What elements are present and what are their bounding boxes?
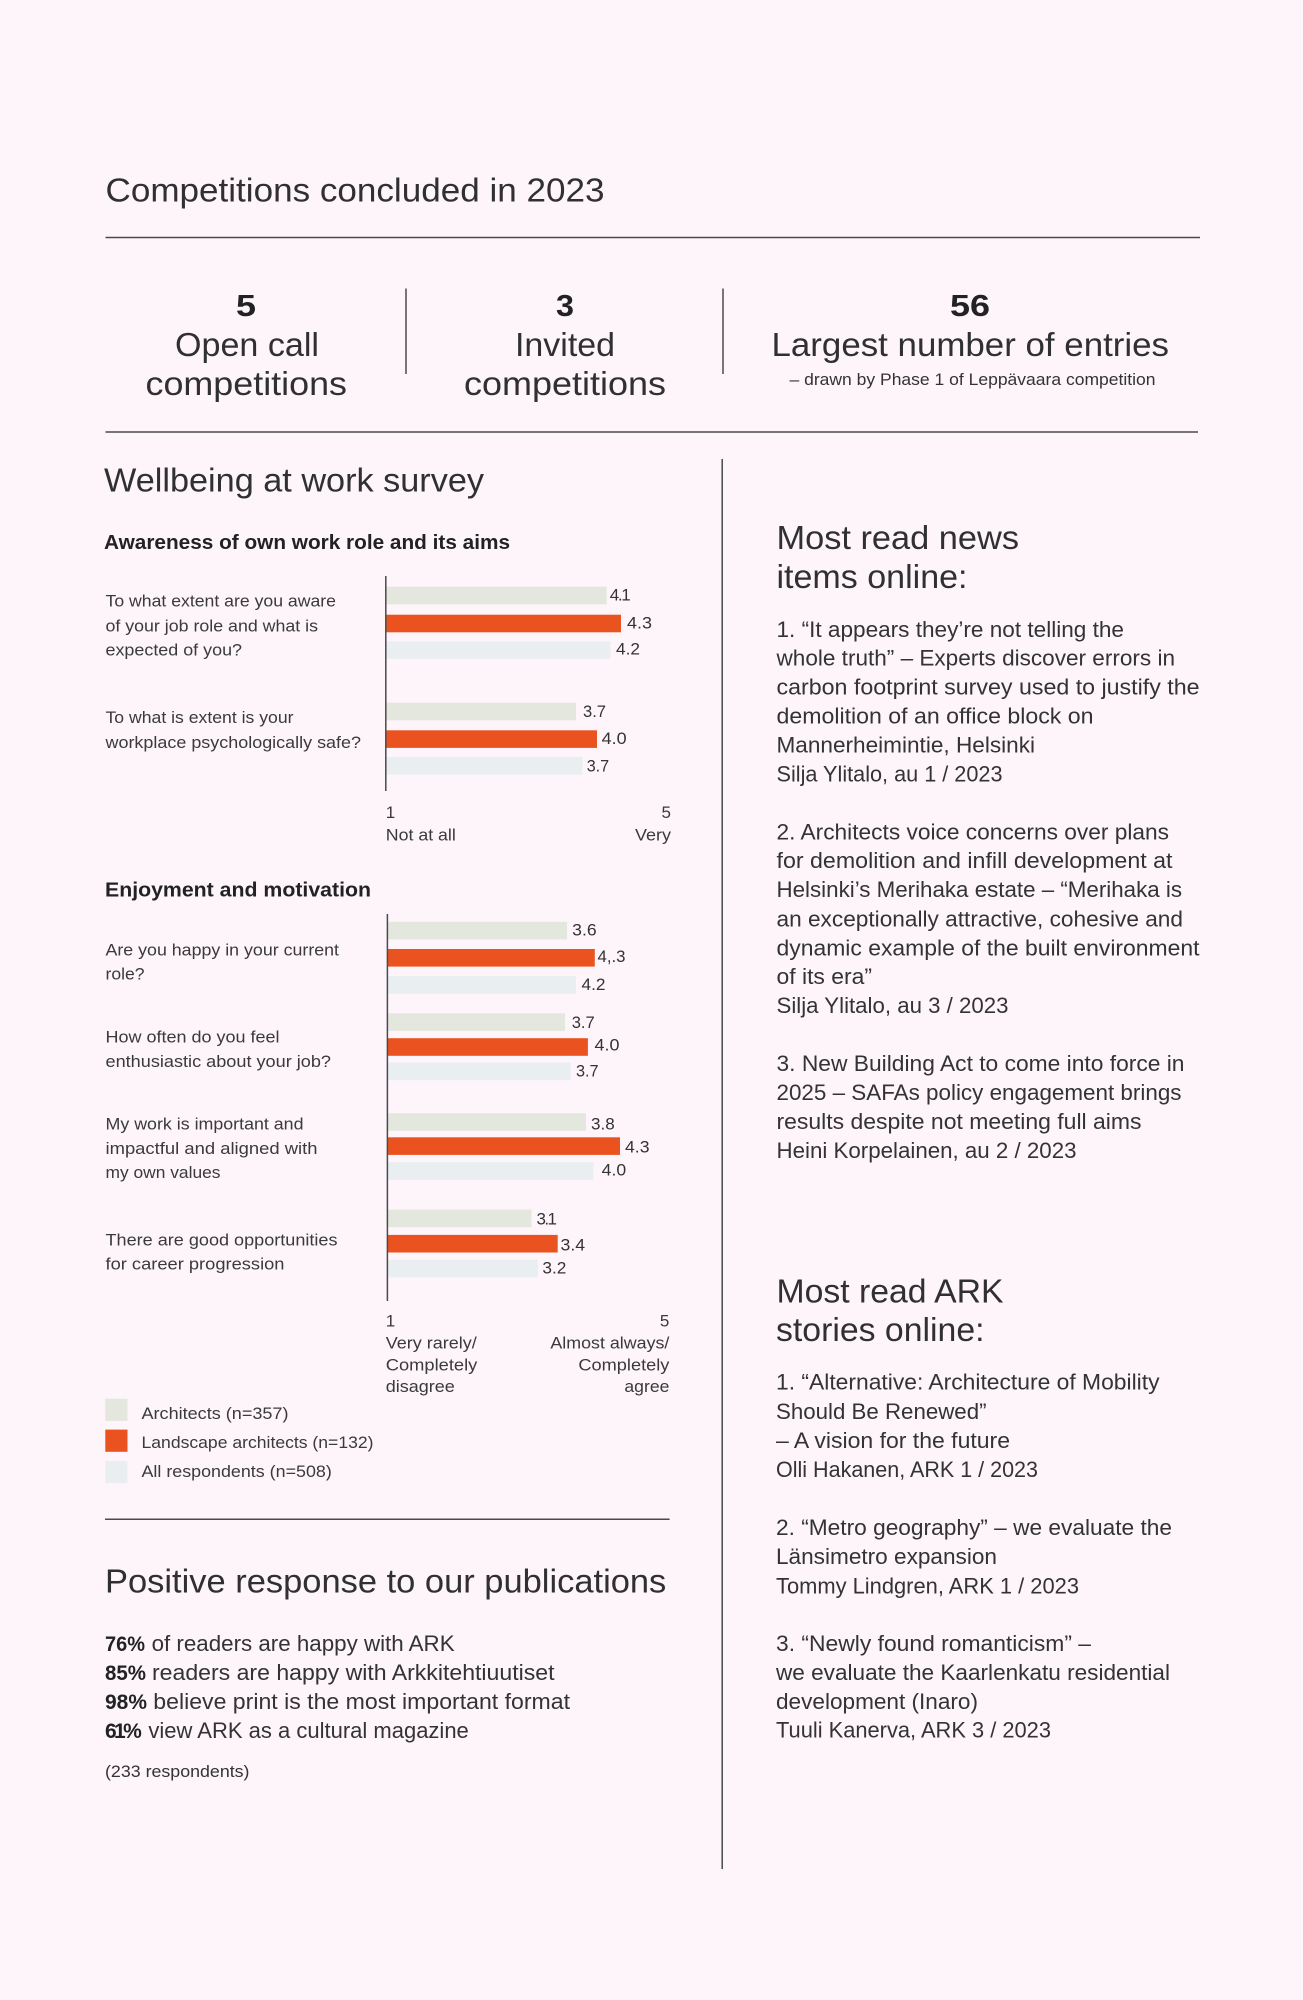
- axis labels: Almost always/: [550, 1334, 670, 1352]
- panel: most read news items: [775, 519, 1200, 1163]
- news item 1: [775, 617, 1200, 786]
- stat: open call competitions: [146, 288, 347, 402]
- stats list: 61%: [105, 1720, 142, 1743]
- news item 1: Mannerheimintie, Helsinki: [776, 732, 1035, 757]
- bar values: 3.7: [587, 756, 609, 776]
- axis labels: disagree: [386, 1377, 455, 1396]
- story 1: 1. “Alternative: Architecture of Mobility: [776, 1370, 1160, 1395]
- heading: most read ARK: [776, 1273, 1004, 1348]
- axis labels: [386, 803, 672, 845]
- bar values: 3.1: [536, 1210, 557, 1228]
- axis labels: Completely: [386, 1355, 478, 1374]
- stats list: 98%: [105, 1691, 147, 1714]
- heading: most read news: Most read news: [776, 519, 1019, 556]
- question labels: workplace psychologically safe?: [104, 733, 361, 752]
- bar values: [583, 586, 652, 776]
- story 2: 2. “Metro geography” – we evaluate the: [776, 1515, 1172, 1540]
- stat: open call competitions: 5: [236, 288, 256, 323]
- footnote: respondents: (233 respondents): [105, 1762, 250, 1781]
- chart: enjoyment and motivation: [106, 914, 670, 1396]
- bar values: 3.7: [583, 702, 606, 721]
- stats list: believe print is the most important format: [153, 1689, 571, 1714]
- heading: most read news: [776, 519, 1019, 595]
- stat: invited competitions: 3: [556, 288, 574, 323]
- news item 2: Silja Ylitalo, au 3 / 2023: [776, 993, 1008, 1018]
- news item 1: demolition of an office block on: [776, 703, 1094, 728]
- bar values: 4.2: [616, 640, 640, 659]
- axis labels: agree: [624, 1377, 669, 1396]
- news item 2: dynamic example of the built environment: [776, 935, 1200, 960]
- story 3: development (Inaro): [776, 1689, 978, 1714]
- question labels: expected of you?: [106, 640, 242, 660]
- axis labels: Very rarely/: [386, 1334, 477, 1352]
- stats list: 85%: [105, 1662, 146, 1685]
- question labels: for career progression: [106, 1254, 284, 1274]
- question labels: of your job role and what is: [106, 616, 318, 636]
- news item 2: 2. Architects voice concerns over plans: [776, 820, 1169, 844]
- question labels: To what extent are you aware: [106, 592, 336, 610]
- question labels: How often do you feel: [106, 1028, 280, 1047]
- story 1: Olli Hakanen, ARK 1 / 2023: [776, 1457, 1038, 1482]
- axis labels: Not at all: [386, 826, 456, 845]
- legend: All respondents (n=508): [142, 1462, 332, 1481]
- bars: [386, 587, 621, 775]
- bar values: [536, 921, 650, 1278]
- story 2: Tommy Lindgren, ARK 1 / 2023: [776, 1573, 1079, 1598]
- axis labels: 5: [660, 1311, 669, 1330]
- story 3: 3. “Newly found romanticism” –: [776, 1631, 1091, 1656]
- heading: wellbeing survey: Wellbeing at work survey: [104, 462, 485, 498]
- bar values: 3.4: [560, 1236, 585, 1254]
- stats list: 76%: [105, 1633, 145, 1656]
- stat: largest number of entries: Largest number of entries: [772, 326, 1169, 363]
- heading: most read news: items online:: [776, 558, 968, 595]
- story 3: we evaluate the Kaarlenkatu residential: [775, 1660, 1170, 1685]
- bar values: 4.0: [602, 729, 627, 748]
- legend: Landscape architects (n=132): [142, 1433, 374, 1452]
- story 1: – A vision for the future: [776, 1428, 1010, 1453]
- news item 1: Silja Ylitalo, au 1 / 2023: [776, 761, 1002, 786]
- chart: awareness of work role: [104, 576, 672, 845]
- news item 2: [776, 820, 1200, 1018]
- stats list: readers are happy with Arkkitehtiuutiset: [152, 1660, 555, 1685]
- stat: invited competitions: Invited: [515, 326, 615, 363]
- news item 3: 2025 – SAFAs policy engagement brings: [776, 1080, 1182, 1105]
- bar values: 4.1: [610, 586, 631, 605]
- news item 2: an exceptionally attractive, cohesive and: [776, 906, 1183, 931]
- news item 1: 1. “It appears they’re not telling the: [776, 617, 1124, 642]
- bar values: 4.0: [602, 1161, 626, 1180]
- bar values: 4.0: [594, 1036, 620, 1054]
- news item 3: Heini Korpelainen, au 2 / 2023: [776, 1138, 1076, 1163]
- question labels: To what is extent is your: [106, 708, 294, 727]
- bar values: 4,.3: [598, 947, 626, 966]
- stats list: view ARK as a cultural magazine: [148, 1718, 469, 1743]
- axis labels: Very: [635, 826, 672, 845]
- news item 2: for demolition and infill development at: [776, 848, 1173, 873]
- bars: [388, 922, 620, 1277]
- news item 3: [776, 1051, 1184, 1163]
- bar values: 4.2: [582, 975, 606, 994]
- stat: largest number of entries: [772, 288, 1169, 389]
- stats list: [105, 1631, 571, 1743]
- axis labels: 1: [386, 803, 395, 822]
- question labels: [104, 592, 361, 752]
- heading: most read ARK: stories online:: [776, 1311, 984, 1348]
- stat: invited competitions: [464, 288, 666, 402]
- story 3: [775, 1631, 1170, 1743]
- bar values: 4.3: [627, 614, 652, 633]
- stat: open call competitions: Open call: [175, 326, 319, 363]
- question labels: my own values: [106, 1163, 220, 1182]
- news item 1: whole truth” – Experts discover errors in: [775, 646, 1175, 671]
- stat: largest number of entries: – drawn by Phase 1 of Leppävaara competition: [790, 370, 1156, 389]
- news item 2: Helsinki’s Merihaka estate – “Merihaka is: [776, 877, 1182, 902]
- bar values: 3.2: [542, 1258, 566, 1278]
- legend: [105, 1399, 374, 1483]
- panel: positive response to publications: [105, 1563, 666, 1781]
- subheading: enjoyment: Enjoyment and motivation: [105, 880, 371, 902]
- question labels: impactful and aligned with: [106, 1139, 318, 1158]
- question labels: My work is important and: [106, 1115, 304, 1134]
- question labels: role?: [106, 965, 144, 984]
- heading: positive response: Positive response to our publications: [105, 1563, 666, 1600]
- panel: competition stats: [146, 288, 1169, 402]
- axis labels: 5: [662, 803, 671, 822]
- news item 1: carbon footprint survey used to justify the: [776, 675, 1200, 700]
- story 1: [776, 1370, 1160, 1482]
- subheading: awareness: Awareness of own work role and its aims: [104, 532, 510, 554]
- bar values: 3.7: [576, 1062, 599, 1080]
- heading: most read ARK: Most read ARK: [776, 1273, 1004, 1310]
- stats list: of readers are happy with ARK: [152, 1631, 455, 1656]
- stat: largest number of entries: 56: [950, 288, 990, 323]
- panel: wellbeing at work survey: [104, 462, 672, 1483]
- question labels: [106, 940, 339, 1274]
- story 2: Länsimetro expansion: [776, 1544, 997, 1569]
- news item 3: 3. New Building Act to come into force in: [776, 1051, 1184, 1076]
- axis labels: [386, 1311, 670, 1396]
- story 3: Tuuli Kanerva, ARK 3 / 2023: [776, 1718, 1051, 1743]
- news item 2: of its era”: [776, 964, 872, 989]
- bar values: 4.3: [625, 1138, 650, 1157]
- stat: invited competitions: competitions: [464, 365, 666, 402]
- story 1: Should Be Renewed”: [776, 1399, 986, 1424]
- axis labels: 1: [386, 1311, 395, 1330]
- legend: Architects (n=357): [142, 1404, 288, 1423]
- bar values: 3.8: [591, 1115, 615, 1134]
- axis labels: Completely: [578, 1355, 670, 1374]
- question labels: There are good opportunities: [106, 1230, 338, 1250]
- title: competitions concluded: Competitions concluded in 2023: [106, 172, 604, 208]
- news item 3: results despite not meeting full aims: [776, 1109, 1142, 1134]
- question labels: enthusiastic about your job?: [106, 1052, 331, 1071]
- bar values: 3.7: [572, 1013, 595, 1032]
- bar values: 3.6: [572, 921, 597, 940]
- panel: most read ARK stories: [775, 1273, 1172, 1743]
- stat: open call competitions: competitions: [146, 365, 347, 402]
- question labels: Are you happy in your current: [106, 940, 339, 960]
- story 2: [776, 1515, 1172, 1598]
